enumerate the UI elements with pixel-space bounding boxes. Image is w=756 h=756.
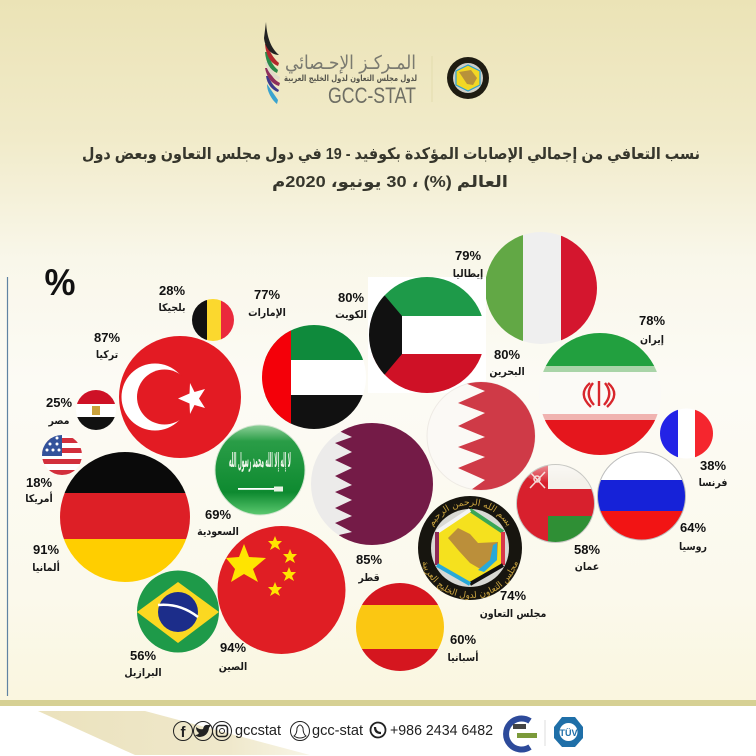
label: Bahrain bbox=[489, 347, 525, 378]
label: Saudi Arabia: 69% bbox=[205, 507, 231, 522]
flag: Saudi Arabia bbox=[215, 425, 305, 515]
flag: Turkey bbox=[119, 336, 241, 458]
label: GCC bbox=[480, 588, 546, 620]
title bbox=[82, 146, 700, 191]
label: Italy: إيطاليا bbox=[453, 268, 483, 280]
label: Russia bbox=[679, 520, 707, 553]
logo GCC-STAT wordmark: GCC-STAT bbox=[328, 83, 416, 108]
label: GCC: مجلس التعاون bbox=[480, 608, 546, 620]
flag: Brazil bbox=[137, 570, 219, 652]
logo ribbon bbox=[264, 22, 280, 104]
label: UAE: الإمارات bbox=[248, 307, 286, 319]
label: Egypt bbox=[46, 395, 72, 427]
label: China: الصين bbox=[219, 661, 247, 673]
percent sign: % bbox=[44, 262, 76, 303]
label: France bbox=[699, 458, 727, 489]
label: USA: 18% bbox=[26, 475, 52, 490]
label: USA: أمريكا bbox=[25, 491, 53, 505]
emblem text bottom: مجلس التعاون لدول الخليج العربية bbox=[422, 562, 518, 600]
label: Bahrain: 80% bbox=[494, 347, 520, 362]
flag: Oman bbox=[516, 463, 596, 543]
label: Belgium: 28% bbox=[159, 283, 185, 298]
label: UAE bbox=[248, 287, 286, 319]
logo: GCC-STAT header bbox=[264, 22, 489, 108]
logo Arabic subtitle: لدول مجلس التعاون لدول الخليج العربية bbox=[284, 74, 417, 84]
handle gccstat: gccstat bbox=[235, 722, 282, 739]
flag: Kuwait bbox=[368, 277, 487, 393]
flag: USA bbox=[42, 435, 82, 475]
label: France: 38% bbox=[700, 458, 726, 473]
facebook glyph: f bbox=[180, 724, 186, 741]
TUV badge: TÜV bbox=[560, 728, 578, 738]
label: Saudi Arabia bbox=[197, 507, 239, 538]
logo Arabic name: المـركـز الإحـصائي bbox=[285, 52, 416, 74]
label: USA bbox=[25, 475, 53, 505]
label: UAE: 77% bbox=[254, 287, 280, 302]
label: Egypt: مصر bbox=[47, 415, 70, 427]
label: France: فرنسا bbox=[699, 477, 727, 489]
title line 1: نسب التعافي من إجمالي الإصابات المؤكدة بكوفيد - 19 في دول مجلس التعاون وبعض دول bbox=[82, 146, 700, 164]
label: Spain: 60% bbox=[450, 632, 476, 647]
flag: UAE bbox=[262, 325, 366, 430]
footer bbox=[0, 700, 756, 756]
flag: Qatar bbox=[310, 423, 436, 546]
flag: China bbox=[218, 526, 346, 654]
label: China bbox=[219, 640, 247, 673]
flag: Spain bbox=[356, 583, 445, 672]
label: Iran: إيران bbox=[640, 334, 664, 346]
label: Brazil: 56% bbox=[130, 648, 156, 663]
label: Germany: 91% bbox=[33, 542, 59, 557]
label: Qatar bbox=[356, 552, 382, 584]
axis line bbox=[6, 277, 8, 696]
label: China: 94% bbox=[220, 640, 246, 655]
flag: Bahrain bbox=[427, 380, 540, 492]
label: Saudi Arabia: السعودية bbox=[197, 526, 239, 538]
label: Bahrain: البحرين bbox=[489, 366, 525, 378]
phone: +986 2434 6482 bbox=[390, 722, 493, 739]
label: Kuwait bbox=[335, 290, 367, 321]
label: Germany bbox=[32, 542, 60, 574]
title line 2: العالم (%) ، 30 يونيو، 2020م bbox=[272, 174, 508, 191]
label: Spain bbox=[448, 632, 478, 664]
label: Oman: عمان bbox=[575, 561, 599, 573]
flag: Italy bbox=[485, 232, 598, 344]
handle gcc-stat: gcc-stat bbox=[312, 722, 364, 739]
iran emblem bbox=[584, 381, 614, 407]
flag: Belgium bbox=[192, 299, 234, 341]
emblem text top: بسم الله الرحمن الرحيم bbox=[432, 498, 510, 528]
label: Brazil: البرازيل bbox=[124, 667, 162, 679]
certification logo G bbox=[506, 719, 537, 750]
label: Belgium bbox=[158, 283, 186, 314]
label: Qatar: 85% bbox=[356, 552, 382, 567]
label: Russia: 64% bbox=[680, 520, 706, 535]
flag: Egypt bbox=[76, 390, 116, 431]
label: Belgium: بلجيكا bbox=[158, 302, 186, 314]
logo GCC emblem small bbox=[447, 57, 489, 99]
TUV badge bbox=[554, 717, 583, 747]
text: لا إله إلا الله محمد رسول الله bbox=[229, 448, 291, 472]
label: Oman: 58% bbox=[574, 542, 600, 557]
label: Oman bbox=[574, 542, 600, 573]
label: Spain: أسبانيا bbox=[448, 650, 478, 664]
label: Kuwait: الكويت bbox=[335, 309, 367, 321]
flag: France bbox=[660, 408, 713, 458]
label: Italy: 79% bbox=[455, 248, 481, 263]
flag: Germany bbox=[60, 452, 190, 583]
flag: Iran bbox=[538, 333, 662, 456]
flag: Russia bbox=[597, 452, 687, 541]
flag: GCC emblem bbox=[418, 496, 522, 600]
label: Italy bbox=[453, 248, 483, 280]
label: Kuwait: 80% bbox=[338, 290, 364, 305]
label: Russia: روسيا bbox=[679, 541, 707, 553]
label: Qatar: قطر bbox=[357, 572, 380, 584]
label: Iran: 78% bbox=[639, 313, 665, 328]
label: GCC: 74% bbox=[500, 588, 526, 603]
label: Germany: ألمانيا bbox=[32, 560, 60, 574]
label: Iran bbox=[639, 313, 665, 346]
social icons bbox=[174, 722, 386, 740]
label: Turkey bbox=[94, 330, 120, 361]
label: Brazil bbox=[124, 648, 162, 679]
label: Turkey: 87% bbox=[94, 330, 120, 345]
footer decorative wedge bbox=[38, 711, 310, 755]
label: Turkey: تركيا bbox=[96, 349, 118, 361]
label: Egypt: 25% bbox=[46, 395, 72, 410]
